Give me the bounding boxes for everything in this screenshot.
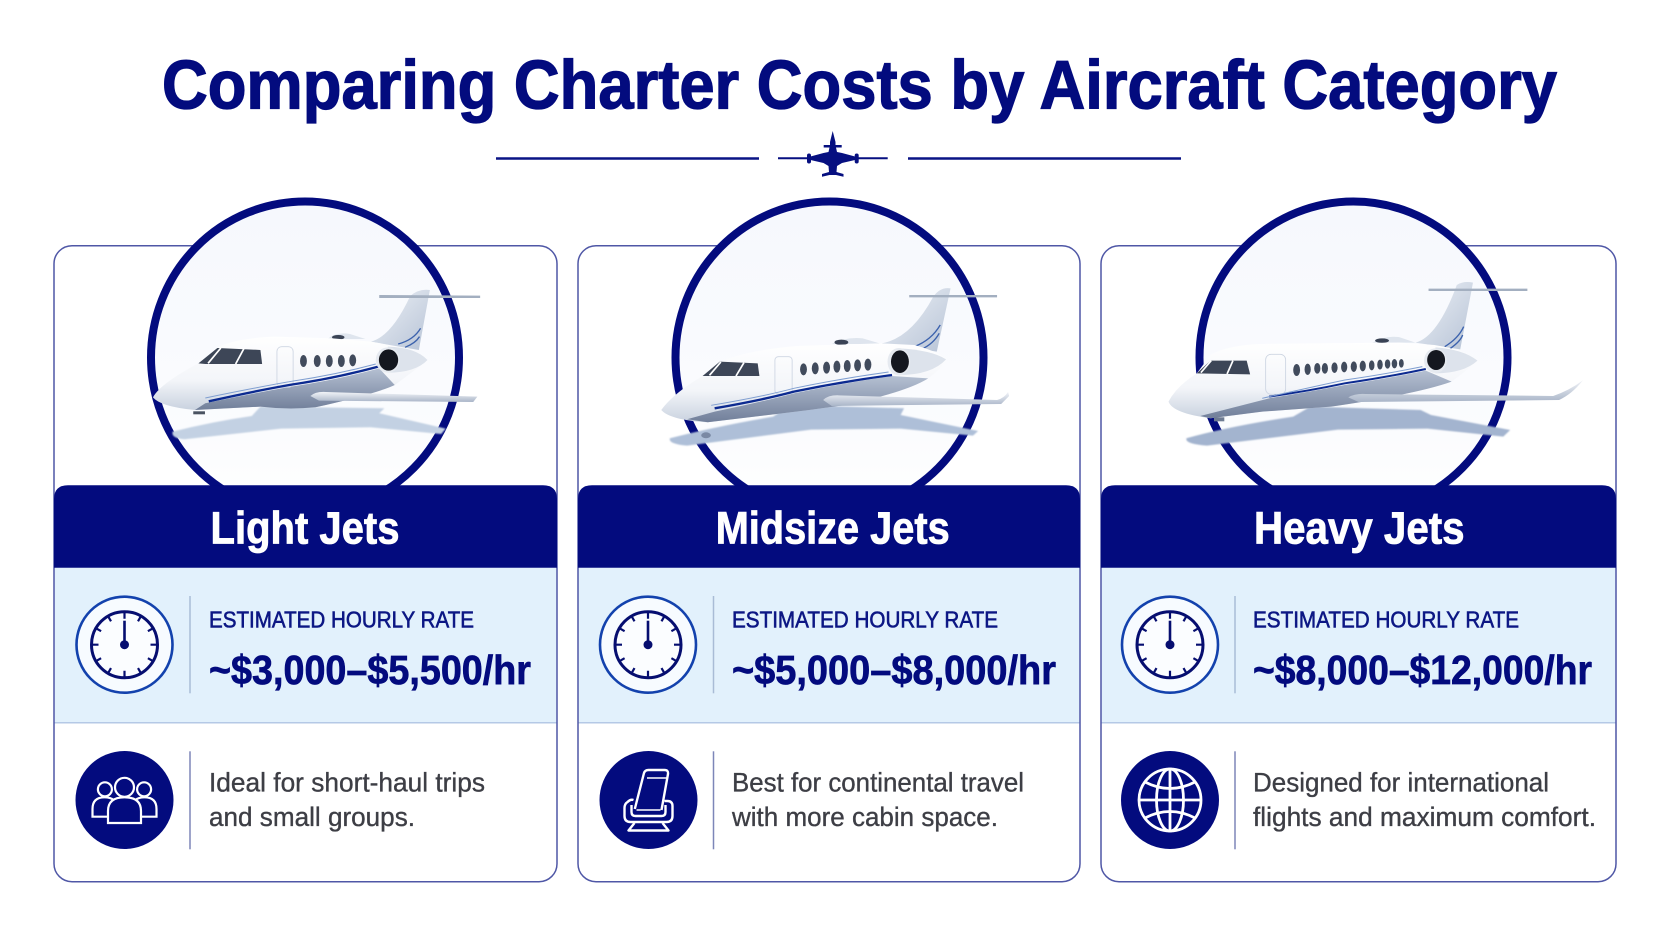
category name: Light Jets xyxy=(210,502,400,553)
category header xyxy=(578,485,1080,568)
rate label: ESTIMATED HOURLY RATE xyxy=(732,607,998,633)
rate label: ESTIMATED HOURLY RATE xyxy=(1253,607,1519,633)
use-case text: Designed for international xyxy=(1253,768,1549,798)
icon: clock xyxy=(1122,597,1218,693)
icon: clock xyxy=(600,597,696,693)
icon: clock xyxy=(76,597,172,693)
aircraft circle xyxy=(1200,202,1508,514)
use-case text xyxy=(731,768,1024,832)
icon: globe xyxy=(1121,751,1219,849)
panel: midsize jets xyxy=(578,202,1080,882)
category name: Midsize Jets xyxy=(716,502,950,553)
icon: people xyxy=(76,751,174,849)
use-case text: Ideal for short-haul trips xyxy=(209,768,485,798)
category header xyxy=(1101,485,1616,568)
aircraft circle xyxy=(151,202,459,514)
aircraft illustration: heavy jet xyxy=(1169,282,1583,446)
panel: heavy jets xyxy=(1101,202,1616,882)
rate band background xyxy=(54,568,557,723)
rate value: ~$8,000–$12,000/hr xyxy=(1253,647,1592,693)
use-case text: Best for continental travel xyxy=(732,768,1024,798)
use-case text: and small groups. xyxy=(209,802,415,832)
card background xyxy=(578,246,1080,882)
card background xyxy=(54,246,557,882)
aircraft illustration: light jet xyxy=(153,290,480,439)
category header xyxy=(54,485,557,568)
aircraft illustration: midsize jet xyxy=(661,288,1009,446)
card background xyxy=(1101,246,1616,882)
rate label: ESTIMATED HOURLY RATE xyxy=(209,607,474,633)
rate band background xyxy=(1101,568,1616,723)
use-case text: flights and maximum comfort. xyxy=(1253,802,1596,832)
use-case text xyxy=(1253,768,1596,832)
rate value: ~$3,000–$5,500/hr xyxy=(209,647,531,693)
panel: light jets xyxy=(54,202,557,882)
category name: Heavy Jets xyxy=(1254,502,1465,553)
use-case text xyxy=(209,768,485,832)
aircraft circle xyxy=(676,202,984,514)
rate value: ~$5,000–$8,000/hr xyxy=(732,647,1056,693)
icon: seat xyxy=(600,751,698,849)
title divider with plane xyxy=(496,131,1181,177)
title: Comparing Charter Costs by Aircraft Category xyxy=(162,46,1557,124)
use-case text: with more cabin space. xyxy=(731,802,998,832)
rate band background xyxy=(578,568,1080,723)
